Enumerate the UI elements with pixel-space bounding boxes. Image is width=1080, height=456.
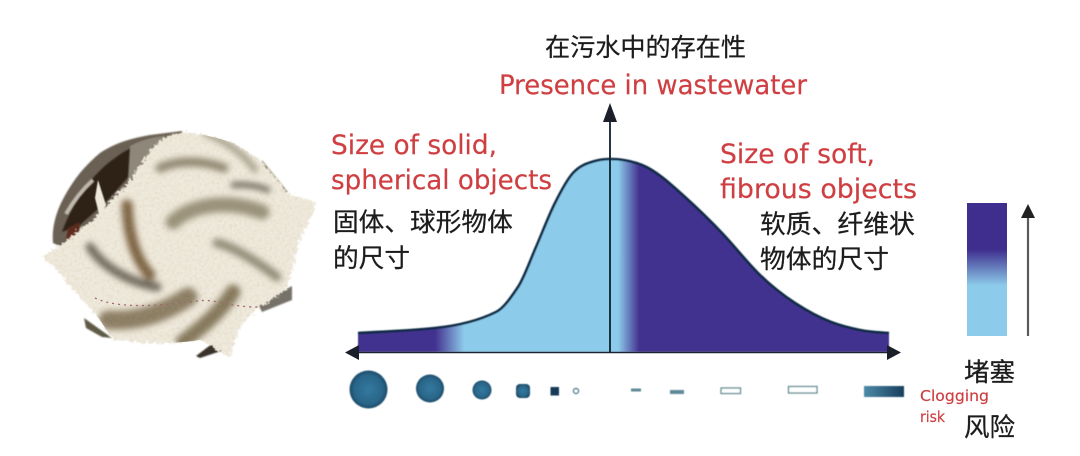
icon: small sphere	[472, 380, 492, 400]
label: solid spherical objects (Chinese): 固体、球形物体	[333, 208, 513, 237]
bell curve: presence by object size	[358, 159, 889, 352]
label: soft fibrous objects (English)	[720, 139, 917, 205]
label: clogging risk (Chinese): 堵塞	[964, 359, 1015, 387]
icon: thin fibre short	[631, 388, 641, 392]
label: clogging risk (Chinese)	[964, 359, 1015, 442]
label: clogging risk (English): Clogging	[920, 387, 989, 405]
heading: presence in wastewater (English): Presence in wastewater	[499, 70, 808, 101]
label: solid spherical objects (Chinese): 的尺寸	[333, 244, 410, 273]
label: soft fibrous objects (Chinese): 软质、纤维状	[760, 210, 915, 239]
photo: clogged impeller wrapped in fibres	[42, 130, 316, 359]
curve outline	[358, 159, 889, 333]
icon: thick fibre bar	[864, 386, 904, 397]
label: solid spherical objects (English): spherical objects	[331, 165, 552, 196]
arrow: rising clogging risk	[1021, 204, 1035, 336]
label: soft fibrous objects (Chinese)	[760, 210, 915, 274]
icon: hollow fibre large	[788, 386, 817, 393]
icon: tiny ring	[574, 388, 578, 394]
label: solid spherical objects (English)	[331, 130, 552, 196]
label: clogging risk (Chinese): 风险	[964, 414, 1015, 442]
swirl shadows	[44, 133, 316, 356]
label: clogging risk (English)	[920, 387, 989, 426]
vertical presence axis with arrow	[603, 103, 617, 352]
object size icons row	[350, 370, 904, 408]
seam stitching	[95, 298, 262, 307]
horizontal size axis with arrows	[345, 345, 901, 360]
label: soft fibrous objects (English): fibrous objects	[720, 174, 917, 205]
icon: hollow fibre small	[721, 388, 740, 394]
white tuft	[95, 180, 106, 218]
icon: tiny square	[550, 387, 559, 396]
label: soft fibrous objects (Chinese): 物体的尺寸	[760, 245, 889, 274]
heading: presence in wastewater (Chinese): 在污水中的存在性	[545, 34, 746, 62]
fibre mass	[42, 132, 317, 357]
label: solid spherical objects (Chinese)	[333, 208, 513, 273]
label: solid spherical objects (English): Size of solid,	[331, 130, 497, 161]
curve fill	[358, 159, 889, 352]
clogging risk colour scale	[967, 203, 1007, 336]
label: soft fibrous objects (English): Size of soft,	[720, 139, 875, 170]
icon: medium sphere	[416, 374, 444, 402]
impeller bowl	[53, 131, 190, 260]
label: clogging risk (English): risk	[920, 408, 945, 426]
fibre weave texture	[44, 133, 316, 356]
icon: smaller sphere	[516, 384, 530, 398]
icon: thin fibre	[670, 390, 684, 394]
icon: large sphere	[350, 370, 388, 408]
